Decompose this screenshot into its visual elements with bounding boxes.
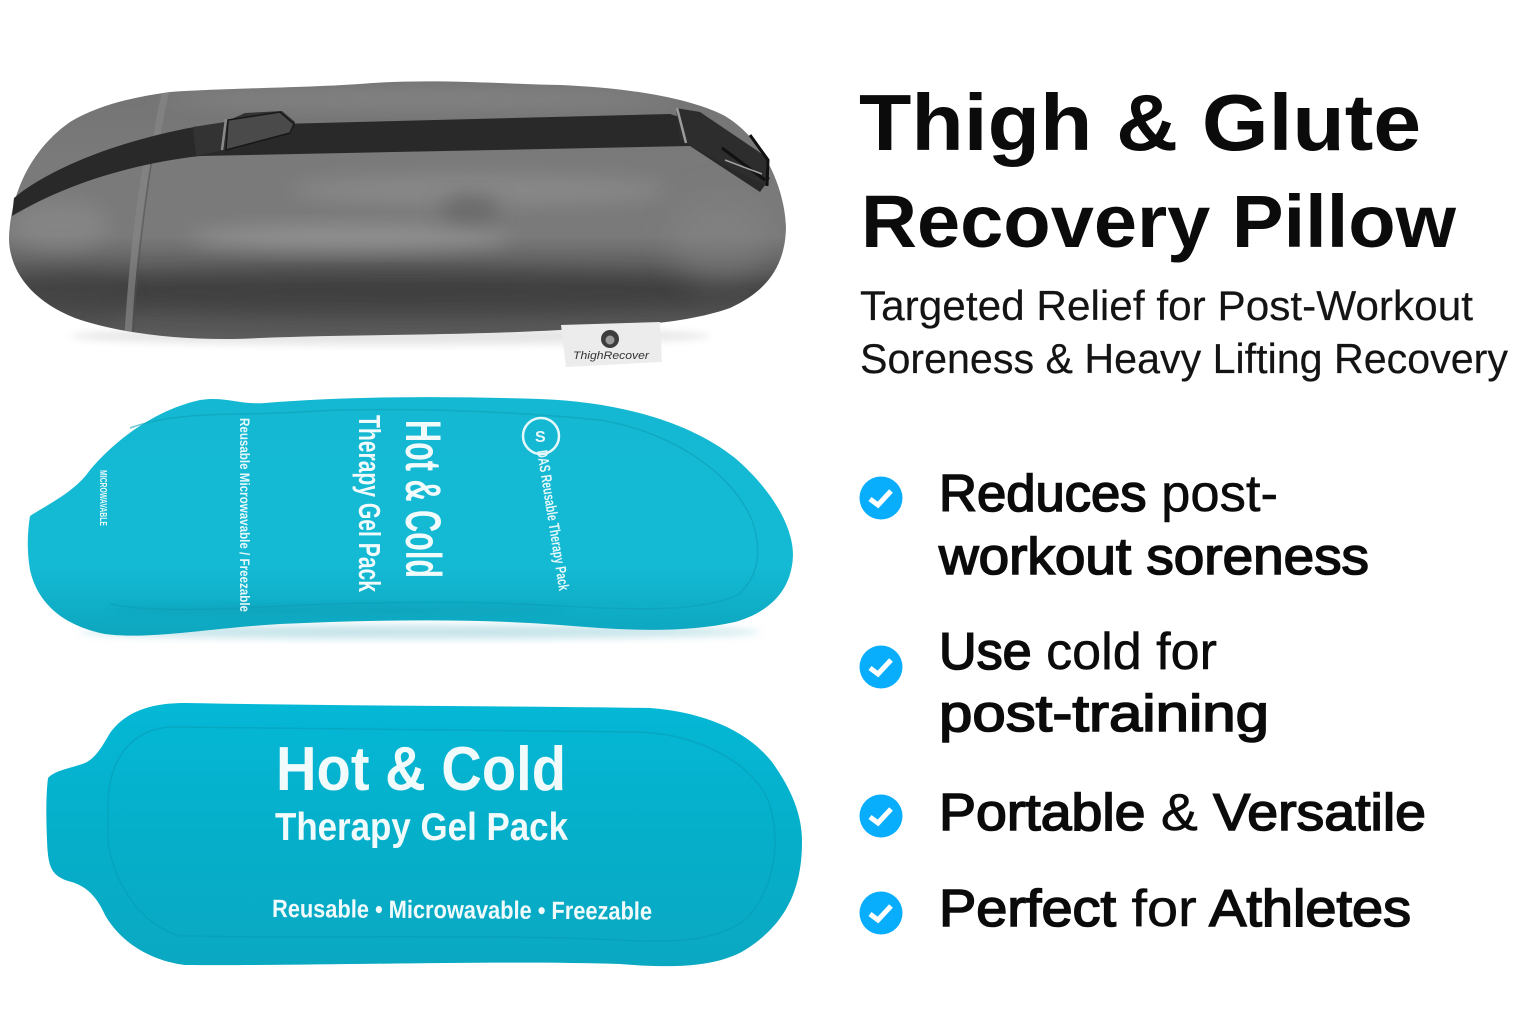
rotated pack text: Hot & Cold — [395, 420, 451, 578]
benefit: athletes: Perfect for Athletes — [939, 880, 1411, 938]
panel: gray recovery pillow — [0, 81, 800, 367]
pack title: Hot & Cold — [276, 735, 566, 804]
pack subtitle: Therapy Gel Pack — [275, 806, 568, 849]
subtitle: Soreness & Heavy Lifting Recovery — [860, 335, 1508, 382]
icon: check — [860, 892, 902, 934]
subtitle — [860, 282, 1508, 382]
benefit: portable: Portable & Versatile — [939, 784, 1426, 842]
benefit: cold use: post-training — [939, 685, 1269, 743]
strap — [12, 114, 770, 216]
title: Recovery Pillow — [861, 180, 1456, 263]
rotated pack text: S — [535, 429, 546, 446]
rotated pack text: Therapy Gel Pack — [352, 415, 387, 593]
subtitle: Targeted Relief for Post-Workout — [860, 282, 1473, 329]
rotated pack text: DAS Reusable Therapy Pack — [533, 449, 572, 592]
rotated pack text — [97, 415, 572, 612]
icon: check — [860, 794, 902, 838]
left buckle — [193, 111, 295, 156]
icon: check — [860, 646, 902, 688]
benefit: reduces soreness: workout soreness — [938, 528, 1369, 586]
benefit: reduces soreness — [860, 465, 1369, 586]
benefit: cold use — [860, 623, 1269, 743]
panel: angled gel pack — [28, 397, 793, 639]
rotated pack text: Reusable Microwavable / Freezable — [237, 418, 253, 612]
pillow label tag: ThighRecover — [573, 350, 650, 362]
right buckle — [676, 108, 768, 186]
panel: flat gel pack — [46, 703, 802, 966]
title — [859, 78, 1456, 263]
side seam — [128, 90, 166, 335]
icon: check — [860, 476, 902, 520]
pillow label tag — [561, 322, 662, 367]
title: Thigh & Glute — [859, 78, 1421, 167]
benefit: cold use: Use cold for — [939, 623, 1217, 681]
benefit: reduces soreness: Reduces post- — [939, 465, 1278, 523]
rotated pack text: MICROWAVABLE — [97, 470, 108, 526]
pack features: Reusable • Microwavable • Freezable — [272, 895, 652, 926]
